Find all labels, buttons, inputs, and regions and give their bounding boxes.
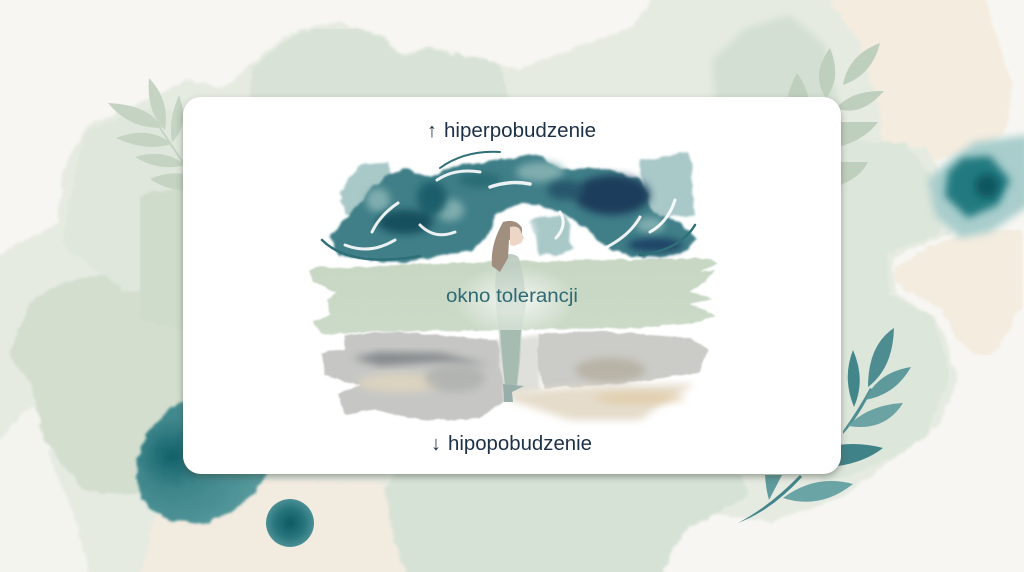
illustration: central light glow <box>453 264 577 336</box>
heading: hiperpobudzenie: hiperpobudzenie <box>444 120 596 142</box>
blot: small teal bottom <box>266 499 314 547</box>
legs <box>500 330 521 386</box>
blot: large teal bottom left <box>136 400 268 524</box>
heading: hipopobudzenie: ↓ <box>431 433 441 455</box>
wash: darker green beside card <box>145 195 200 320</box>
pale under-wash <box>340 152 695 256</box>
wash: beige bottom <box>150 490 430 572</box>
thin swirl strokes <box>345 171 675 249</box>
wash: mid green right <box>830 150 938 470</box>
illustration: grey low-arousal wash <box>320 331 708 420</box>
blot: teal right <box>928 135 1024 238</box>
wash: mid green left <box>22 255 195 482</box>
navy darks <box>377 172 683 252</box>
feet and shadow <box>503 384 524 402</box>
label: okno tolerancji: okno tolerancji <box>446 286 578 307</box>
illustration: woman figure <box>492 221 526 402</box>
wash: white bloom bottom left <box>0 420 80 572</box>
hair <box>492 221 522 272</box>
leaves: top left branch <box>108 78 190 190</box>
mid teal mass <box>328 155 697 262</box>
lighter patches <box>366 162 664 233</box>
card <box>183 97 841 474</box>
illustration: calm green band <box>308 258 717 334</box>
face <box>510 227 524 246</box>
heading: hipopobudzenie: hipopobudzenie <box>448 433 592 455</box>
wash: mid green upper left <box>75 120 200 280</box>
heading: hiperpobudzenie: ↑ <box>427 120 437 142</box>
body <box>495 254 526 385</box>
wash: beige right <box>905 240 1012 345</box>
illustration: storm clouds <box>322 152 697 262</box>
wash: mid green top right <box>712 15 840 110</box>
leaves: top right branch <box>787 43 884 186</box>
wash: mid green top <box>260 36 500 110</box>
wash: mid green bottom <box>398 460 735 572</box>
leaves: bottom right teal branch <box>738 328 911 523</box>
wash: beige top right <box>820 0 1000 155</box>
